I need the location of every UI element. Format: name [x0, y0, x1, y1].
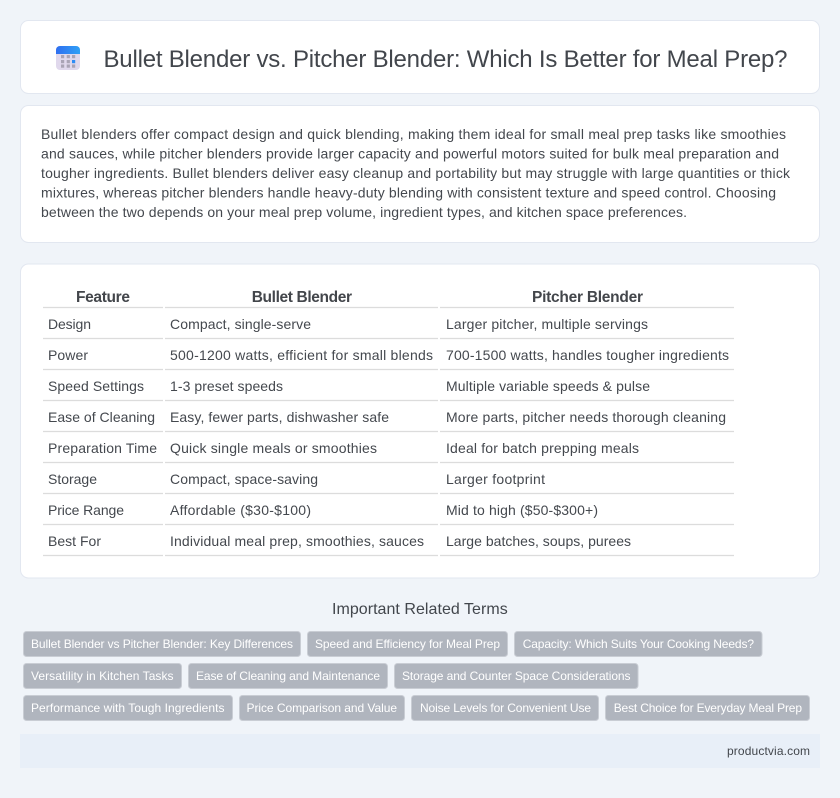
text block: description: mixtures, whereas pitcher blenders handle heavy-duty blending with consistent texture and speed control. Choosing — [41, 184, 776, 200]
row: speed settings: Speed Settings — [48, 378, 144, 394]
tag: Storage and Counter Space Considerations — [402, 669, 630, 683]
row: price range: Price Range — [48, 502, 124, 518]
tag: Ease of Cleaning and Maintenance — [196, 669, 380, 683]
row: preparation time: Quick single meals or smoothies — [170, 440, 377, 456]
row: design: Design — [48, 316, 91, 332]
row: speed settings: 1-3 preset speeds — [170, 378, 283, 394]
row: design: Larger pitcher, multiple servings — [446, 316, 648, 332]
heading: important related terms: Important Related Terms — [332, 601, 508, 618]
tag: Speed and Efficiency for Meal Prep — [315, 637, 500, 651]
row: storage: Larger footprint — [446, 471, 545, 487]
row: speed settings: Multiple variable speeds & pulse — [446, 378, 650, 394]
text block: description: and sauces, while pitcher blenders provide larger capacity and powerful motors suited for bulk meal preparation and — [41, 146, 779, 162]
row: ease of cleaning — [48, 409, 726, 425]
row: preparation time: Ideal for batch prepping meals — [446, 440, 639, 456]
text block: description: between the two depends on your meal prep volume, ingredient types, and kitchen space preferences. — [41, 204, 687, 220]
text block: description: tougher ingredients. Bullet blenders deliver easy cleanup and portability but may struggle with large quantities or thick — [41, 165, 791, 181]
panel: comparison table card — [20, 264, 820, 578]
tag — [24, 632, 300, 656]
row: design — [48, 316, 648, 332]
table header — [76, 289, 643, 306]
tag: Best Choice for Everyday Meal Prep — [614, 701, 802, 715]
row: design: Compact, single-serve — [170, 316, 311, 332]
tag — [240, 696, 404, 720]
tag: Price Comparison and Value — [246, 701, 397, 715]
tag: Capacity: Which Suits Your Cooking Needs? — [523, 637, 754, 651]
table header: Bullet Blender — [252, 289, 352, 306]
row: price range: Mid to high ($50-$300+) — [446, 502, 598, 518]
text block: description: Bullet blenders offer compact design and quick blending, making them ideal for small meal prep tasks like smoothies — [41, 126, 786, 142]
row: storage — [48, 471, 545, 487]
tag — [308, 632, 508, 656]
row: price range: Affordable ($30-$100) — [170, 502, 311, 518]
text block: description — [41, 126, 791, 220]
row: power — [48, 347, 729, 363]
panel: title card — [20, 20, 820, 94]
row: storage: Compact, space-saving — [170, 471, 318, 487]
row: power: Power — [48, 347, 88, 363]
row: preparation time — [48, 440, 639, 456]
row: price range — [48, 502, 598, 518]
tag: Versatility in Kitchen Tasks — [31, 669, 174, 683]
tag: Performance with Tough Ingredients — [31, 701, 224, 715]
row: best for — [48, 533, 631, 549]
row: storage: Storage — [48, 471, 97, 487]
row: ease of cleaning: Ease of Cleaning — [48, 409, 155, 425]
panel: description card — [20, 106, 820, 242]
row: ease of cleaning: Easy, fewer parts, dishwasher safe — [170, 409, 389, 425]
table header: Feature — [76, 289, 130, 306]
icon: calendar — [56, 46, 80, 70]
tag list — [24, 632, 810, 720]
row: speed settings — [48, 378, 650, 394]
tag — [606, 696, 810, 720]
tag — [24, 664, 182, 688]
tag — [412, 696, 598, 720]
footer — [20, 734, 820, 768]
tag — [514, 632, 762, 656]
tag — [188, 664, 388, 688]
row: best for: Best For — [48, 533, 101, 549]
row: best for: Large batches, soups, purees — [446, 533, 631, 549]
row: preparation time: Preparation Time — [48, 440, 157, 456]
title: Bullet Blender vs. Pitcher Blender: Which Is Better for Meal Prep? — [104, 46, 788, 73]
table grid lines — [43, 308, 734, 556]
table header: Pitcher Blender — [532, 289, 643, 306]
row: best for: Individual meal prep, smoothies, sauces — [170, 533, 424, 549]
tag — [394, 664, 638, 688]
tag: Noise Levels for Convenient Use — [420, 701, 591, 715]
tag — [24, 696, 232, 720]
footer: productvia.com — [727, 744, 810, 758]
row: power: 700-1500 watts, handles tougher ingredients — [446, 347, 729, 363]
tag: Bullet Blender vs Pitcher Blender: Key Differences — [31, 637, 293, 651]
row: ease of cleaning: More parts, pitcher needs thorough cleaning — [446, 409, 726, 425]
row: power: 500-1200 watts, efficient for small blends — [170, 347, 433, 363]
